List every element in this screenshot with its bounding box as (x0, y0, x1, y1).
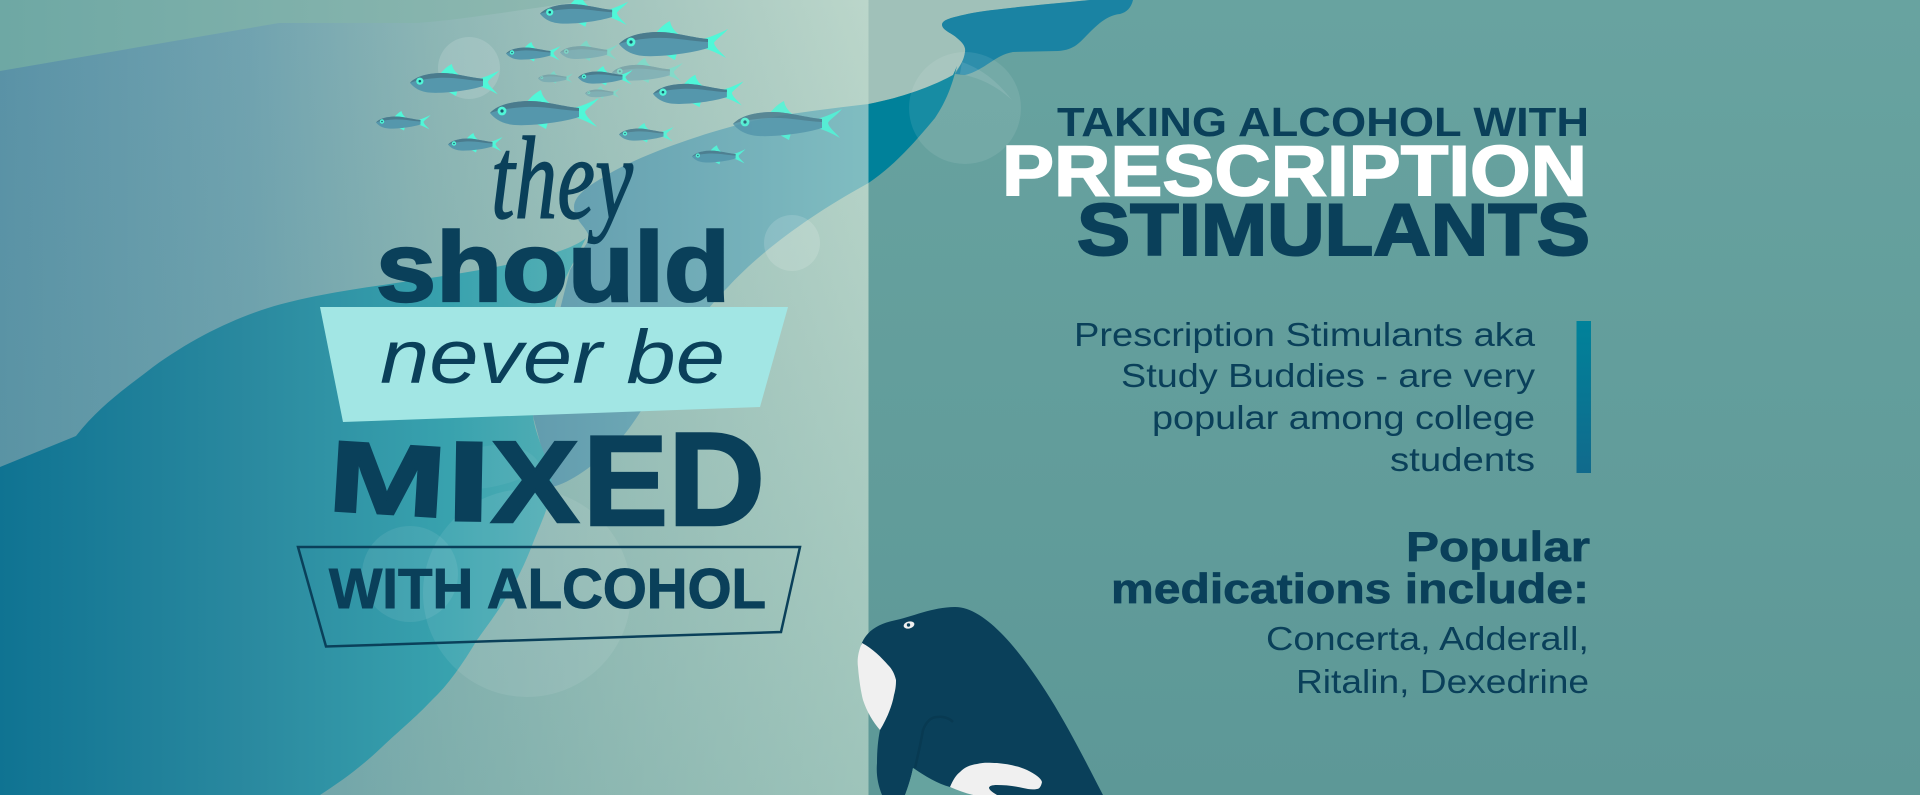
headline: MIXED: D (668, 406, 765, 554)
frame: with alcohol: WITH ALCOHOL (329, 557, 766, 621)
headline: they: they (491, 113, 633, 244)
text block: description: Study Buddies - are very (1121, 357, 1536, 394)
panel: left background (0, 0, 868, 795)
text block: medication list: Ritalin, Dexedrine (1296, 663, 1589, 700)
text block: description: popular among college (1152, 399, 1535, 436)
title: STIMULANTS (1077, 190, 1590, 271)
headline: MIXED: X (491, 417, 579, 547)
headline: should: should (376, 212, 730, 322)
title: TAKING ALCOHOL WITH (1057, 99, 1589, 145)
icon: manatee (858, 607, 1103, 795)
text block: description: students (1390, 441, 1535, 478)
headline: MIXED: I (446, 418, 492, 545)
text block: medication list: Concerta, Adderall, (1266, 620, 1589, 657)
title (1002, 99, 1590, 271)
text block: description (1074, 316, 1536, 478)
panel: right background (868, 0, 1920, 795)
accent bar (1576, 321, 1591, 473)
school of fish (376, 0, 842, 164)
heading: popular medications: Popular (1406, 523, 1590, 570)
top-left band (0, 0, 590, 71)
frame: with alcohol (298, 547, 800, 646)
text block: description: Prescription Stimulants aka (1074, 316, 1536, 353)
dark wave (0, 238, 586, 795)
fish: foreground fish (376, 0, 842, 164)
middle wave (533, 104, 868, 487)
text block: medication list (1266, 620, 1589, 700)
banner: never be: never be (380, 315, 725, 400)
banner: never be (320, 307, 788, 422)
wave: right blue region (942, 0, 1133, 75)
heading: popular medications (1111, 523, 1590, 612)
title: PRESCRIPTION (1002, 132, 1587, 212)
wave: right light region (868, 0, 1090, 104)
fish: faint background fish (538, 40, 683, 98)
heading: popular medications: medications include: (1111, 565, 1589, 612)
wave: right teal region (868, 66, 957, 183)
headline: MIXED (326, 406, 765, 554)
bubbles (362, 37, 1021, 697)
headline: MIXED: M (326, 420, 449, 539)
headline: MIXED: E (583, 410, 668, 553)
